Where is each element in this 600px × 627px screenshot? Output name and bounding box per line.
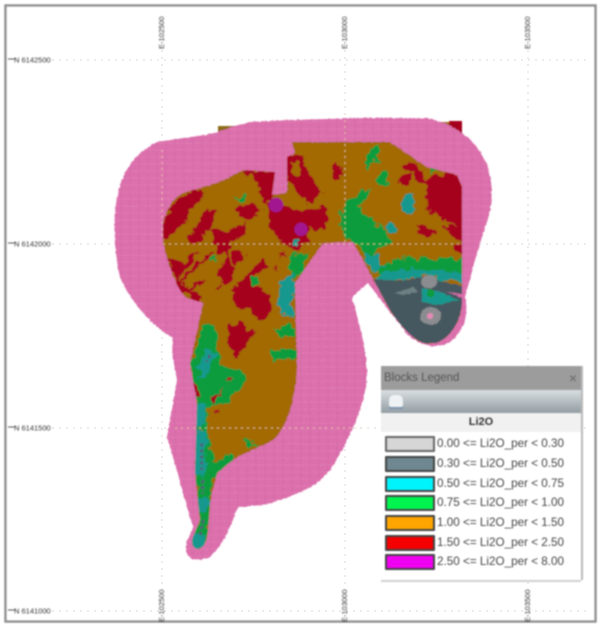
legend row 3	[384, 475, 564, 493]
teal blocks west	[274, 237, 301, 319]
legend row 6: 1.50 <= Li2O_per < 2.50	[437, 536, 564, 549]
south tail grades	[187, 330, 298, 552]
legend title bar: ×	[569, 370, 577, 386]
easting labels bottom: E-103500	[523, 589, 532, 622]
northing labels: N 6141000	[14, 606, 51, 616]
brown inclusion	[292, 160, 301, 176]
legend row 7: 2.50 <= Li2O_per < 8.00	[437, 555, 564, 568]
easting labels top	[157, 16, 532, 49]
easting labels bottom: E-102500	[157, 589, 166, 622]
strip behind the envelope	[218, 121, 462, 134]
legend row 4: 0.75 <= Li2O_per < 1.00	[437, 496, 564, 509]
red streaks west	[178, 252, 285, 292]
block model map	[115, 118, 492, 560]
pink envelope	[115, 118, 492, 560]
easting labels bottom: E-103000	[340, 589, 349, 622]
mixed blocks in the low-grade zone	[395, 275, 467, 325]
northing labels: N 6142000	[14, 240, 51, 248]
legend row 2: 0.30 <= Li2O_per < 0.50	[437, 457, 564, 470]
northing labels: N 6141500	[14, 424, 51, 432]
legend heading	[381, 413, 581, 432]
green blocks west	[192, 193, 310, 360]
legend window	[381, 366, 581, 580]
brown Li2O body	[163, 142, 462, 549]
purple high-grade blocks	[269, 198, 308, 236]
dark streaks south	[200, 355, 210, 535]
legend title bar: Blocks Legend	[384, 372, 459, 384]
easting labels bottom	[157, 589, 532, 622]
legend title bar	[381, 366, 581, 390]
green blocks south	[190, 330, 298, 548]
legend row 5	[384, 514, 564, 532]
legend row 7	[384, 553, 564, 571]
east lobe grades	[338, 145, 467, 285]
dark red blocks west	[163, 157, 339, 357]
easting labels top: E-102500	[157, 16, 166, 49]
legend row 1	[384, 435, 564, 453]
teal blocks east	[363, 193, 467, 285]
legend row 4	[384, 494, 564, 512]
green blocks east	[338, 145, 467, 277]
legend row 1: 0.00 <= Li2O_per < 0.30	[437, 437, 564, 450]
legend toolbar	[381, 390, 581, 414]
red blocks south	[187, 330, 255, 416]
legend row 3: 0.50 <= Li2O_per < 0.75	[437, 477, 564, 490]
teal blocks south	[190, 350, 215, 552]
legend row 5: 1.00 <= Li2O_per < 1.50	[437, 516, 564, 529]
legend row 2	[384, 455, 564, 473]
easting labels top: E-103500	[523, 16, 532, 49]
grade domains clipped to the body	[163, 145, 467, 552]
low-grade southern lobe	[373, 275, 467, 343]
legend heading: Li2O	[469, 416, 493, 428]
easting labels top: E-103000	[340, 16, 349, 49]
northing labels	[8, 56, 51, 616]
west lobe grades	[163, 157, 339, 361]
dark red blocks east	[400, 162, 467, 257]
legend row 6	[384, 534, 564, 552]
dashed lines over the map	[162, 120, 462, 428]
northing labels: N 6142500	[14, 56, 51, 64]
